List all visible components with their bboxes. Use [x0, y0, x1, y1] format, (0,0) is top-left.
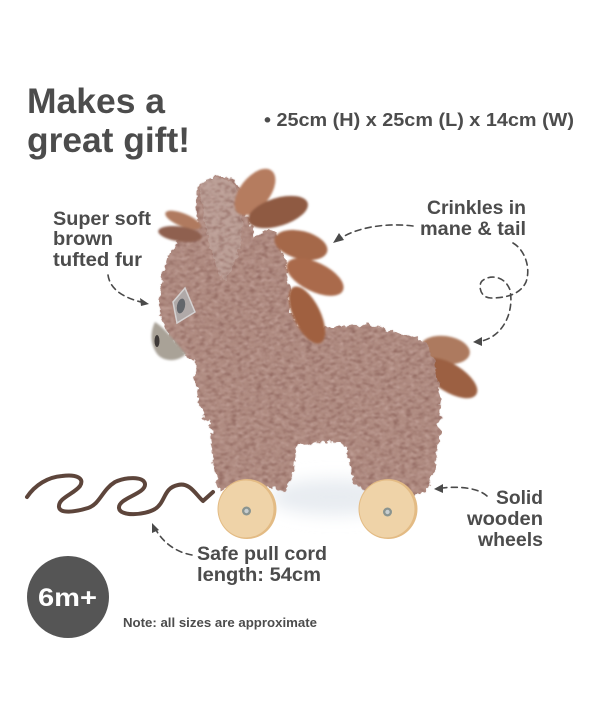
title: Makes a — [27, 82, 166, 121]
callout: wheels — [466, 488, 543, 551]
callout: pull cord: length: 54cm — [197, 565, 321, 586]
tail petals — [416, 333, 484, 406]
callout: wheels: wheels — [477, 530, 543, 551]
callout: fur: Super soft — [53, 209, 152, 230]
front wheel — [218, 479, 276, 539]
arrow: wheels — [434, 484, 487, 496]
ear highlight — [200, 178, 242, 282]
callout: fur — [53, 209, 152, 271]
callout: fur: brown — [53, 229, 113, 250]
arrow: pull cord — [152, 523, 192, 555]
eye patch — [173, 288, 195, 323]
callout: pull cord — [197, 544, 327, 586]
title: great gift! — [27, 121, 190, 160]
title — [27, 82, 190, 160]
arrow: looping to tail — [473, 243, 528, 346]
callout: mane and tail: mane & tail — [420, 219, 526, 240]
note: Note: all sizes are approximate — [123, 616, 317, 630]
mane petals — [157, 161, 349, 349]
snout — [152, 322, 186, 360]
callout: pull cord: Safe pull cord — [197, 544, 327, 565]
dimensions text: • 25cm (H) x 25cm (L) x 14cm (W) — [264, 110, 574, 130]
age badge — [27, 556, 109, 638]
floor shadow — [270, 479, 400, 515]
callout: fur: tufted fur — [53, 250, 143, 271]
rear wheel — [358, 479, 418, 539]
age badge: 6m+ — [38, 584, 97, 612]
callout: wheels: Solid — [496, 488, 543, 509]
callout: mane and tail — [420, 198, 526, 240]
fur body, legs and head — [159, 176, 440, 495]
callout: mane and tail: Crinkles in — [427, 198, 526, 219]
toy: plush horse on wheels — [152, 161, 484, 539]
arrow: to mane — [333, 225, 413, 243]
arrow: fur — [108, 275, 149, 306]
pull cord — [27, 475, 213, 514]
callout: wheels: wooden — [466, 509, 543, 530]
